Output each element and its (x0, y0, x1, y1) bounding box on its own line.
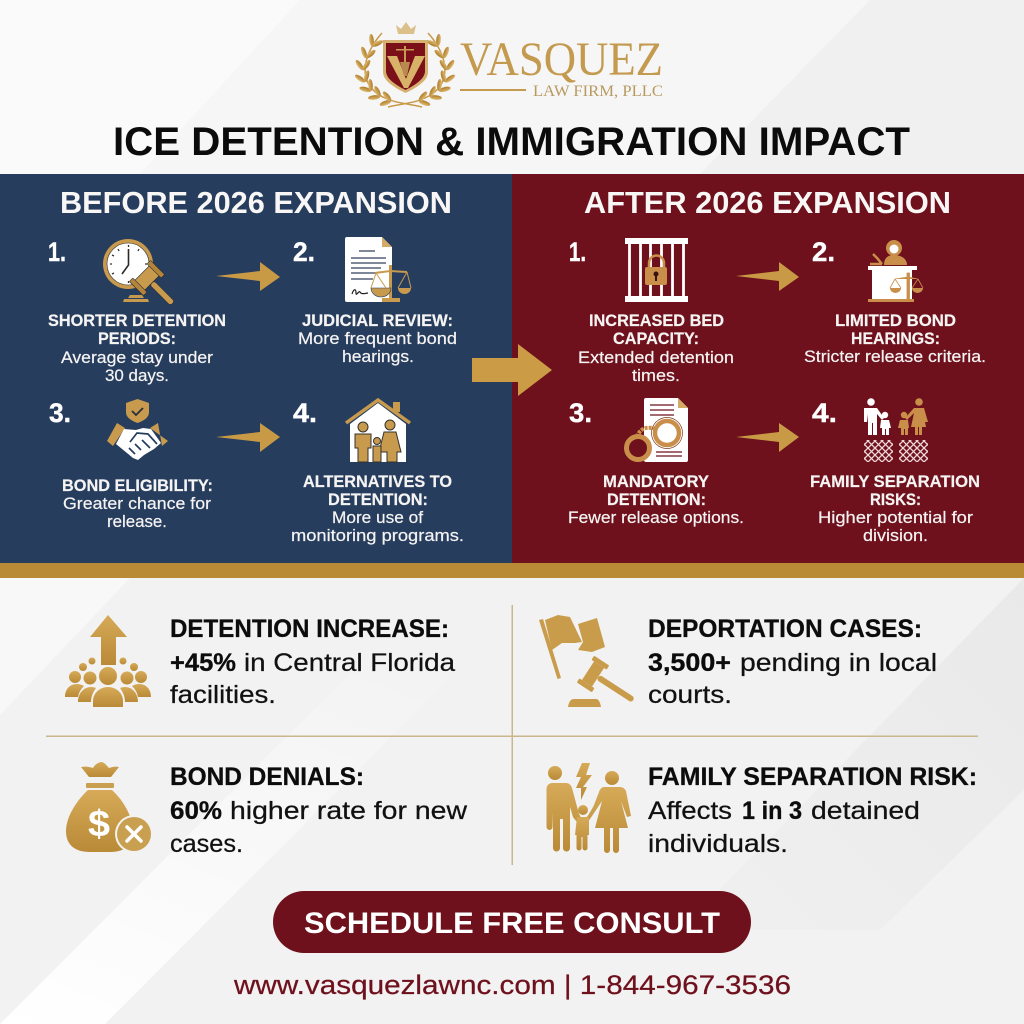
label text: hearings. (342, 348, 414, 366)
number 4: 4. (812, 398, 837, 428)
label text: times. (632, 367, 680, 385)
panel: after 2026 expansion (512, 174, 1024, 563)
label text: MANDATORY (603, 473, 709, 491)
label text: ALTERNATIVES TO (303, 473, 452, 491)
item 4: alternatives to detention (291, 398, 464, 545)
panel: before 2026 expansion (0, 174, 512, 563)
label text: RISKS: (870, 491, 921, 509)
icon: jail bars with lock (625, 238, 688, 302)
stat text: 1 in 3 (742, 797, 802, 825)
label text: DETENTION: (328, 491, 428, 509)
stat text: 3,500+ (648, 649, 731, 677)
stat text: Affects (648, 797, 732, 825)
icon: laurel wreath (354, 33, 456, 107)
icon: money bag with x: $ (88, 803, 110, 844)
item 3: bond eligibility (49, 398, 213, 531)
icon: clock and gavel (103, 239, 183, 314)
stat text: DETENTION INCREASE: (170, 615, 449, 643)
label text (48, 312, 226, 385)
stat text (648, 763, 977, 858)
label text: Extended detention (578, 349, 734, 367)
label text: Stricter release criteria. (804, 348, 986, 366)
label text (568, 473, 744, 527)
label text: division. (863, 527, 928, 545)
arrow: 3 to 4 (216, 423, 280, 452)
logo (354, 22, 663, 107)
icon: handcuffs and document (626, 398, 688, 462)
icon: family in house (346, 400, 410, 462)
item 1: increased bed capacity (569, 237, 734, 385)
title: ICE DETENTION & IMMIGRATION IMPACT (113, 120, 910, 164)
icon: shield (383, 40, 428, 93)
number 4: 4. (293, 398, 317, 428)
label text: release. (107, 513, 167, 531)
gold band (0, 563, 1024, 578)
stat text: DEPORTATION CASES: (648, 615, 922, 643)
label text: monitoring programs. (291, 527, 464, 545)
stat text: BOND DENIALS: (170, 763, 364, 791)
label text: HEARINGS: (851, 330, 940, 348)
label text: LIMITED BOND (835, 312, 956, 330)
label text: CAPACITY: (613, 330, 699, 348)
item 2: judicial review (293, 237, 457, 366)
stat: deportation cases (539, 615, 937, 714)
label text: DETENTION: (607, 491, 706, 509)
label text: 30 days. (105, 367, 169, 385)
label text: Average stay under (61, 349, 214, 367)
label text: More frequent bond (298, 330, 457, 348)
stat text (170, 615, 455, 709)
arrow: 1 to 2 (736, 262, 799, 291)
label text: Fewer release options. (568, 509, 744, 527)
label text (62, 477, 213, 531)
stat: bond denials (66, 762, 468, 858)
logo rule (460, 89, 526, 91)
label text (810, 473, 980, 545)
stat text: individuals. (648, 830, 788, 858)
item 1: shorter detention periods (48, 237, 226, 385)
number 2: 2. (812, 237, 835, 267)
label text: SHORTER DETENTION (48, 312, 226, 330)
arrow: before to after (472, 344, 552, 396)
button: schedule free consult (273, 891, 751, 953)
label text: FAMILY SEPARATION (810, 473, 980, 491)
label text: More use of (332, 509, 423, 527)
logo wordmark: VASQUEZ (460, 33, 663, 86)
stat text: FAMILY SEPARATION RISK: (648, 763, 977, 791)
label text: BOND ELIGIBILITY: (62, 477, 213, 495)
label text (804, 312, 986, 366)
stat text: facilities. (170, 681, 276, 709)
label text (291, 473, 464, 545)
icon: crown (396, 22, 416, 34)
icon: flag and gavel (539, 615, 642, 714)
stat: detention increase (65, 615, 455, 709)
item 2: limited bond hearings (804, 237, 986, 366)
label text: INCREASED BED (589, 312, 724, 330)
icon: separated families and fences (864, 398, 928, 462)
number 1: 1. (48, 237, 66, 267)
logo subtitle: LAW FIRM, PLLC (533, 83, 663, 100)
stat text: cases. (170, 830, 243, 858)
number 3: 3. (49, 398, 71, 428)
stat text (170, 763, 468, 858)
stat: family separation risk (544, 763, 977, 858)
label text: PERIODS: (98, 330, 176, 348)
panel heading: after: AFTER 2026 EXPANSION (584, 185, 951, 220)
stat text: detained (811, 797, 920, 825)
icon: arrow over crowd (65, 615, 151, 707)
icon: money bag with x (66, 762, 153, 853)
stat text: pending in local (740, 649, 937, 677)
icon: judge at bench (868, 240, 923, 302)
icon: shield and handshake (107, 399, 168, 460)
panel heading: before: BEFORE 2026 EXPANSION (60, 185, 452, 220)
item 4: family separation risks (810, 398, 980, 545)
stat text: higher rate for new (230, 797, 468, 825)
label text (578, 312, 734, 385)
icon: separated family (544, 763, 631, 853)
footer contact line: www.vasquezlawnc.com | 1-844-967-3536 (233, 970, 791, 1000)
label text: Higher potential for (818, 509, 974, 527)
arrow: 1 to 2 (216, 262, 280, 291)
arrow: 3 to 4 (736, 423, 799, 452)
stat text: +45% (170, 649, 236, 677)
icon: document and scales (345, 237, 411, 302)
label text: JUDICIAL REVIEW: (302, 312, 453, 330)
label text: Greater chance for (63, 495, 212, 513)
stat text: courts. (648, 681, 732, 709)
label text (298, 312, 457, 366)
number 3: 3. (569, 398, 592, 428)
item 3: mandatory detention (568, 398, 744, 527)
number 1: 1. (569, 237, 586, 267)
button: schedule free consult: SCHEDULE FREE CONSULT (304, 907, 720, 940)
stat text: in Central Florida (244, 649, 455, 677)
number 2: 2. (293, 237, 315, 267)
stat text (648, 615, 937, 709)
stat text: 60% (170, 797, 222, 825)
